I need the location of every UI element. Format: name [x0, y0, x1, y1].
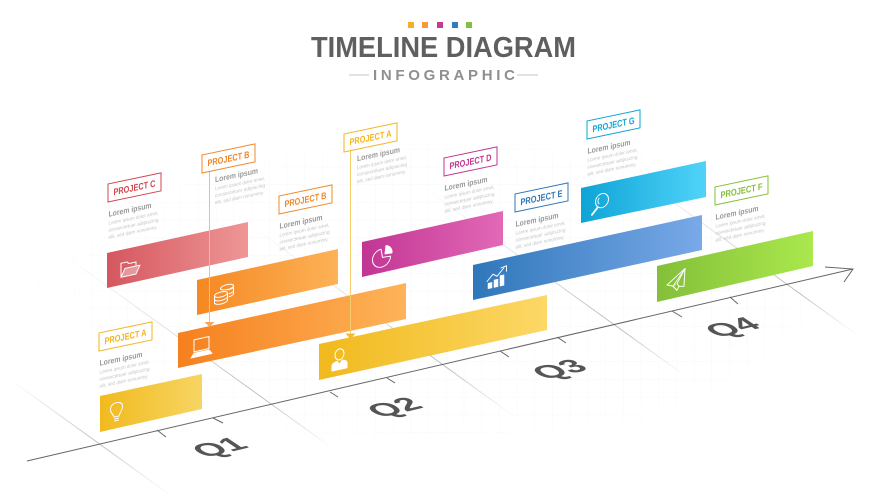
icon: magnifier — [592, 192, 608, 215]
icon: folder — [121, 259, 140, 277]
panel: project B lower label: elit, sed diam nonummy. — [280, 237, 328, 253]
panel: project G label: Lorem ipsum — [588, 138, 630, 156]
panel: project A upper label: PROJECT A — [349, 129, 392, 148]
bar: project A yellow — [100, 374, 202, 432]
panel: project C label: elit, sed diam nonummy. — [108, 225, 157, 241]
panel: project A upper label: Lorem ipsum dolor amet, — [357, 155, 407, 171]
panel: project B lower label — [279, 185, 332, 253]
panel: project B lower label: Lorem ipsum — [280, 213, 322, 231]
bar: project B orange upper — [197, 249, 338, 315]
panel: project D label: elit, sed diam nonummy. — [444, 199, 493, 215]
panel: project A lower label — [99, 322, 152, 390]
panel: project A lower label: consectetuer adipiscing — [100, 366, 150, 383]
panel: project F label: consectetuer adipiscing — [716, 220, 766, 237]
subtitle: INFOGRAPHIC — [373, 67, 515, 84]
panel: project B upper label: PROJECT B — [207, 150, 250, 169]
bar: project A yellow long — [319, 295, 547, 380]
panel: project G label: consectetuer adipiscing — [588, 154, 638, 171]
bar: project B orange lower — [178, 283, 406, 368]
icon: growth chart — [487, 266, 506, 289]
panel: project B lower label: Lorem ipsum dolor amet, — [280, 222, 330, 239]
panel: project F label: PROJECT F — [720, 182, 763, 201]
panel: project G label: PROJECT G — [592, 116, 634, 135]
panel: project D label: Lorem ipsum dolor amet, — [444, 184, 494, 201]
panel: project A lower label: Lorem ipsum — [100, 350, 142, 368]
panel: project A upper label: elit, sed diam nonummy. — [357, 169, 406, 185]
bar: project E blue — [473, 215, 702, 300]
bar: project C red — [107, 222, 248, 288]
panel: project D label: consectetuer adipiscing — [444, 191, 495, 208]
panel: project C label: Lorem ipsum — [108, 201, 152, 219]
panel: project B lower label: consectetuer adipiscing — [280, 229, 330, 246]
panel: project F label: Lorem ipsum dolor amet, — [716, 213, 766, 230]
panel: project A lower label: PROJECT A — [104, 328, 147, 347]
panel: project A upper label: Lorem ipsum — [357, 145, 400, 163]
label Q3: Q3 — [523, 355, 595, 384]
panel: project F label: elit, sed diam nonummy. — [716, 228, 764, 244]
panel: project D label: PROJECT D — [449, 153, 492, 172]
panel: project F label — [715, 176, 768, 244]
icon: pie chart — [372, 244, 392, 269]
panel: project C label — [108, 173, 161, 241]
icon: coins — [214, 283, 234, 305]
panel: project D label — [444, 147, 497, 215]
arrow: project B connector — [204, 172, 214, 327]
color squares — [408, 22, 472, 28]
panel: project B upper label: consectetuer adipiscing — [215, 183, 265, 199]
panel: project A upper label: consectetuer adipiscing — [357, 162, 407, 178]
icon: laptop — [191, 336, 212, 358]
panel: project C label: PROJECT C — [113, 179, 156, 198]
arrow: project A connector — [346, 151, 356, 339]
label Q4: Q4 — [696, 313, 768, 342]
panel: project E label: Lorem ipsum — [516, 211, 558, 229]
timeline axis arrow — [27, 267, 853, 461]
panel: project B lower label: PROJECT B — [284, 191, 327, 210]
panel: project A lower label: elit, sed diam nonummy. — [100, 374, 148, 390]
panel: project B upper label: Lorem ipsum dolor amet, — [215, 176, 265, 192]
panel: project F label: Lorem ipsum — [716, 204, 758, 222]
panel: project A upper label — [344, 121, 407, 188]
panel: project G label: elit, sed diam nonummy. — [588, 162, 636, 178]
icon: paper plane — [667, 269, 685, 292]
panel: project G label — [587, 110, 640, 178]
label Q2: Q2 — [358, 393, 430, 422]
title: TIMELINE DIAGRAM — [311, 32, 576, 64]
panel: project B upper label: Lorem ipsum — [215, 166, 258, 184]
bar: project D magenta — [362, 211, 503, 277]
panel: project E label: Lorem ipsum dolor amet, — [516, 220, 566, 237]
icon: light bulb — [110, 401, 122, 422]
panel: project E label — [515, 183, 568, 251]
panel: project D label: Lorem ipsum — [444, 175, 488, 193]
panel: project E label: PROJECT E — [520, 189, 563, 208]
bar: project F green — [657, 231, 813, 302]
label Q1: Q1 — [183, 433, 255, 462]
ground diagonals — [8, 160, 860, 497]
panel: project B upper label — [202, 142, 265, 209]
icon: person — [332, 347, 347, 371]
panel: project E label: consectetuer adipiscing — [516, 227, 566, 244]
panel: project E label: elit, sed diam nonummy. — [516, 235, 564, 251]
panel: project A lower label: Lorem ipsum dolor amet, — [100, 359, 150, 376]
bar: project G cyan — [581, 161, 706, 223]
panel: project C label: consectetuer adipiscing — [108, 217, 159, 234]
panel: project B upper label: elit, sed diam nonummy. — [215, 190, 264, 206]
panel: project G label: Lorem ipsum dolor amet, — [588, 147, 638, 164]
panel: project C label: Lorem ipsum dolor amet, — [108, 210, 158, 227]
